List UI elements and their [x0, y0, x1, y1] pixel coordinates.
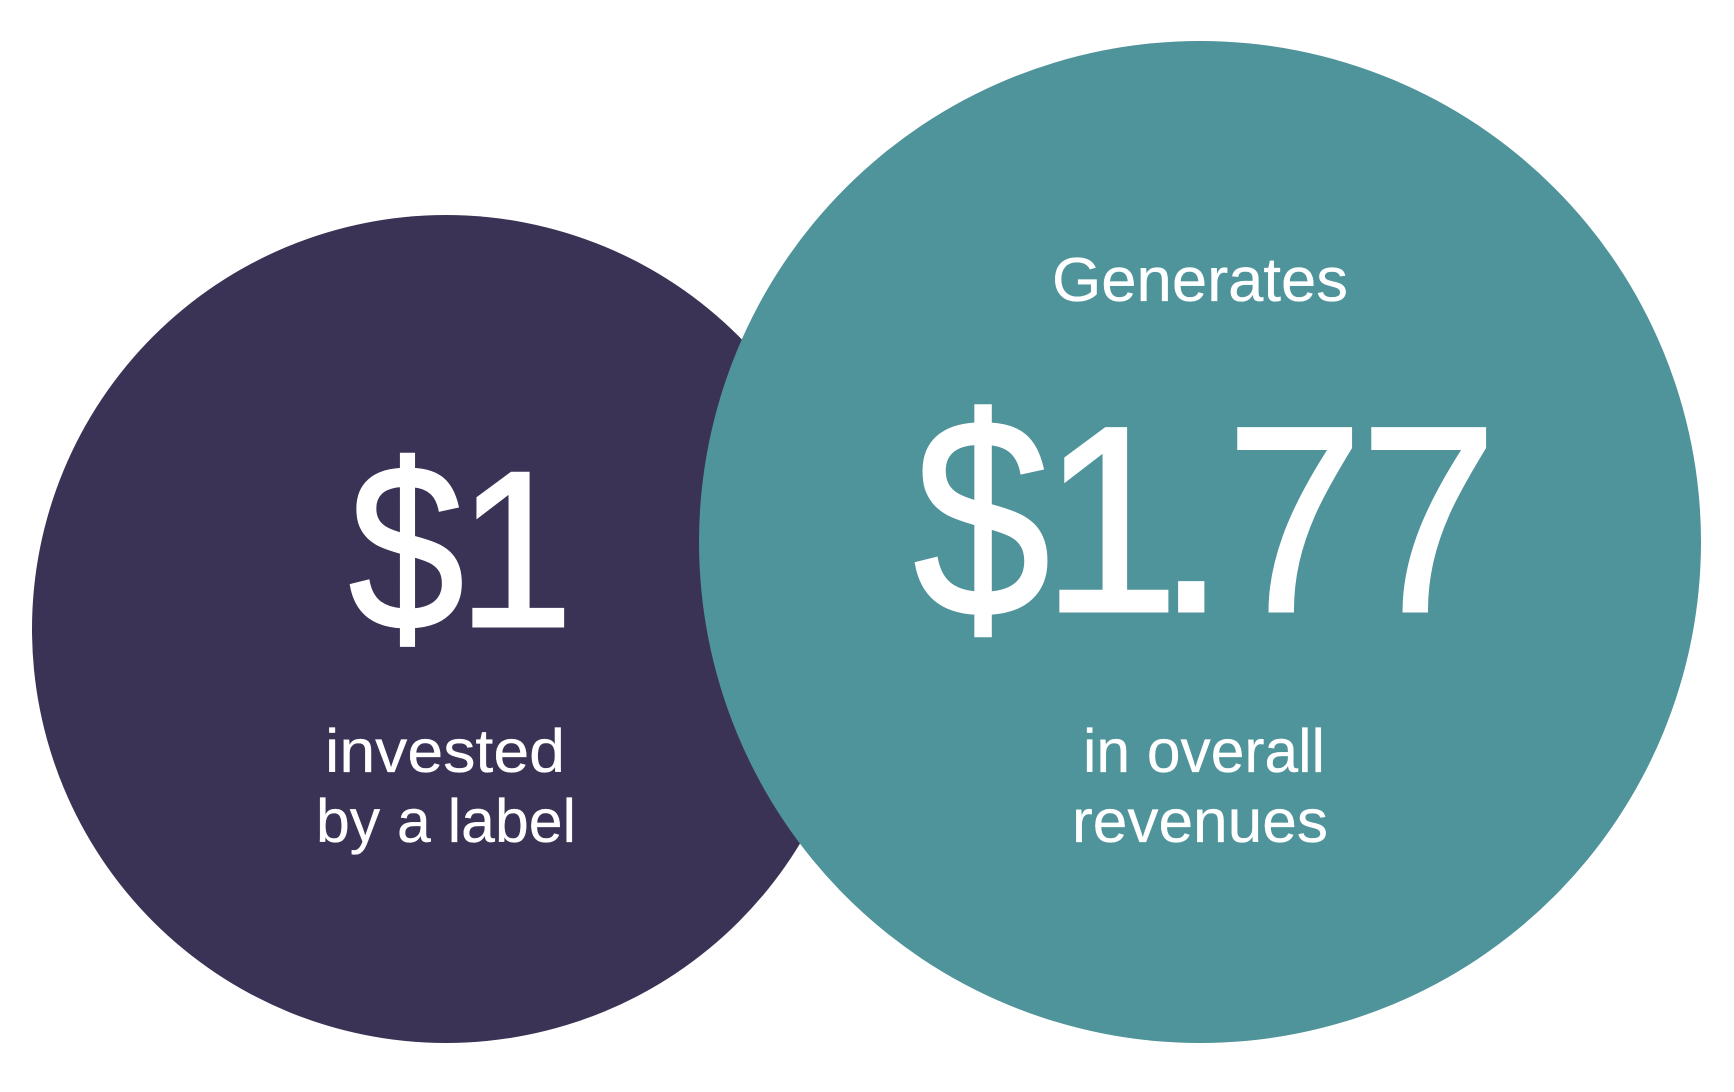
- value: $1.77: $: [914, 360, 1050, 677]
- text: Generates: Generates: [1052, 246, 1348, 315]
- text: invested by a label: by a label: [316, 787, 576, 855]
- panel: invested circle: [32, 215, 860, 1043]
- panel: generates circle: [699, 41, 1701, 1043]
- text: in overall revenues: revenues: [1072, 787, 1328, 855]
- value: $1: [349, 415, 573, 679]
- value: $1: 1: [458, 426, 573, 674]
- text: invested by a label: [316, 717, 576, 855]
- text: in overall revenues: in overall: [1083, 717, 1325, 785]
- text: invested by a label: invested: [325, 717, 565, 785]
- value: $1: $: [349, 415, 464, 679]
- value: $1.77: 1.77: [1042, 372, 1497, 668]
- text: in overall revenues: [1072, 717, 1328, 855]
